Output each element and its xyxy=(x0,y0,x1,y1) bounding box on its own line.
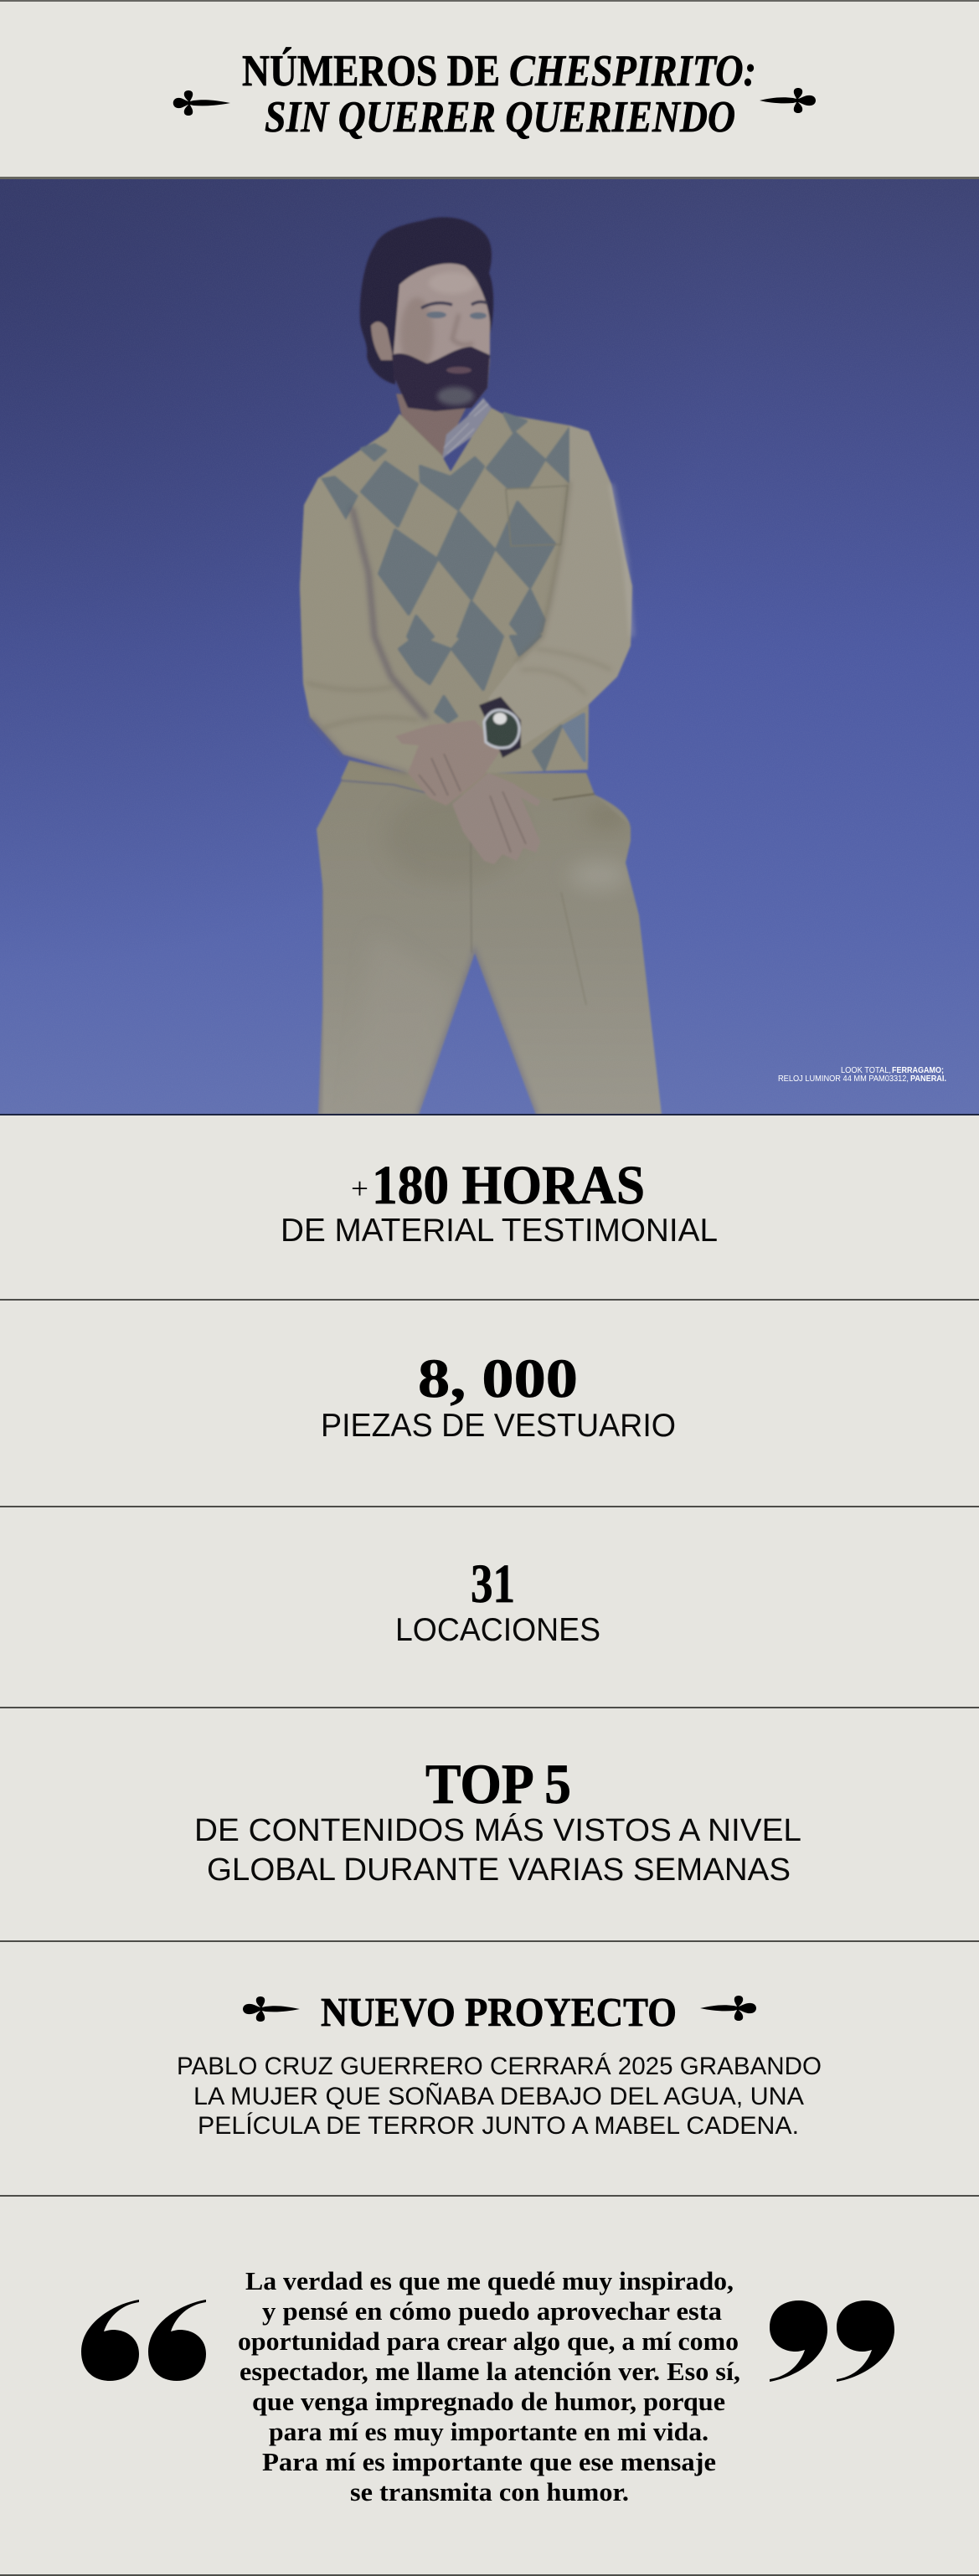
panel: vestuario: 8, 000 xyxy=(418,1348,578,1409)
heading: NUEVO PROYECTO xyxy=(321,1989,677,2035)
panel: horas xyxy=(281,1155,718,1249)
text block: LA MUJER QUE SOÑABA DEBAJO DEL AGUA, UNA xyxy=(193,2082,804,2110)
quote text: espectador, me llame la atención ver. Eso sí, xyxy=(240,2357,740,2386)
quote text xyxy=(238,2266,740,2506)
icon: left ornament xyxy=(243,1996,300,2022)
icon: opening quotation mark xyxy=(81,2300,206,2381)
panel: vestuario xyxy=(321,1348,676,1444)
panel: top 5: TOP 5 xyxy=(425,1752,571,1816)
belt xyxy=(340,765,348,779)
quote text: La verdad es que me quedé muy inspirado, xyxy=(245,2266,734,2295)
caption: photo credits: FERRAGAMO; xyxy=(892,1065,944,1075)
panel: top 5: GLOBAL DURANTE VARIAS SEMANAS xyxy=(207,1852,791,1888)
trousers xyxy=(317,760,662,1115)
sweater body xyxy=(318,407,590,774)
title: NÚMEROS DE xyxy=(242,47,500,95)
text block: PABLO CRUZ GUERRERO CERRARÁ 2025 GRABANDO xyxy=(177,2053,822,2080)
panel: header xyxy=(0,0,979,179)
right sleeve xyxy=(488,425,632,748)
quote text: se transmita con humor. xyxy=(350,2477,629,2506)
shirt collar xyxy=(442,398,492,459)
nose xyxy=(452,314,473,345)
left sleeve xyxy=(300,478,429,773)
panel: top 5: DE CONTENIDOS MÁS VISTOS A NIVEL xyxy=(194,1812,801,1848)
head xyxy=(360,217,493,411)
caption: photo credits xyxy=(778,1065,946,1084)
ear xyxy=(371,322,394,360)
quote text: que venga impregnado de humor, porque xyxy=(252,2387,725,2416)
panel: horas: 180 HORAS xyxy=(372,1155,645,1216)
panel: vestuario: PIEZAS DE VESTUARIO xyxy=(321,1408,676,1444)
caption: photo credits: LOOK TOTAL, xyxy=(841,1065,891,1075)
upper hand xyxy=(395,720,500,806)
quote text: y pensé en cómo puedo aprovechar esta xyxy=(262,2296,723,2326)
panel: nuevo proyecto xyxy=(177,1989,822,2140)
panel: quote xyxy=(81,2266,894,2506)
panel: horas: DE MATERIAL TESTIMONIAL xyxy=(281,1213,718,1249)
icon: closing quotation mark xyxy=(770,2300,894,2382)
watch xyxy=(479,697,521,758)
panel: locaciones: 31 xyxy=(471,1553,515,1615)
icon: left ornament xyxy=(173,90,230,116)
panel: locaciones: LOCACIONES xyxy=(395,1612,600,1648)
brows and eyes xyxy=(421,301,487,308)
text block: PELÍCULA DE TERROR JUNTO A MABEL CADENA. xyxy=(198,2112,799,2140)
text block xyxy=(177,2053,822,2140)
title: CHESPIRITO: xyxy=(509,47,756,95)
panel: top 5 xyxy=(194,1752,801,1888)
panel: locaciones xyxy=(395,1553,600,1648)
hair xyxy=(360,217,493,384)
icon: right ornament xyxy=(760,88,816,113)
face xyxy=(394,264,490,411)
lower hand xyxy=(452,773,540,864)
title: SIN QUERER QUERIENDO xyxy=(265,93,735,142)
beard xyxy=(392,347,490,411)
quote text: Para mí es importante que ese mensaje xyxy=(262,2447,716,2476)
neck xyxy=(396,394,469,459)
figure xyxy=(300,217,662,1115)
photo: man in argyle sweater on blue backdrop xyxy=(0,179,979,1115)
quote text: para mí es muy importante en mi vida. xyxy=(269,2417,708,2446)
chest pocket xyxy=(506,486,568,546)
quote text: oportunidad para crear algo que, a mí como xyxy=(238,2326,739,2356)
title xyxy=(242,47,756,142)
icon: right ornament xyxy=(700,1996,756,2021)
panel: horas: + xyxy=(351,1172,368,1205)
caption: photo credits: RELOJ LUMINOR 44 MM PAM03312, xyxy=(778,1074,909,1084)
caption: photo credits: PANERAI. xyxy=(910,1074,946,1084)
argyle diamonds xyxy=(362,414,585,770)
